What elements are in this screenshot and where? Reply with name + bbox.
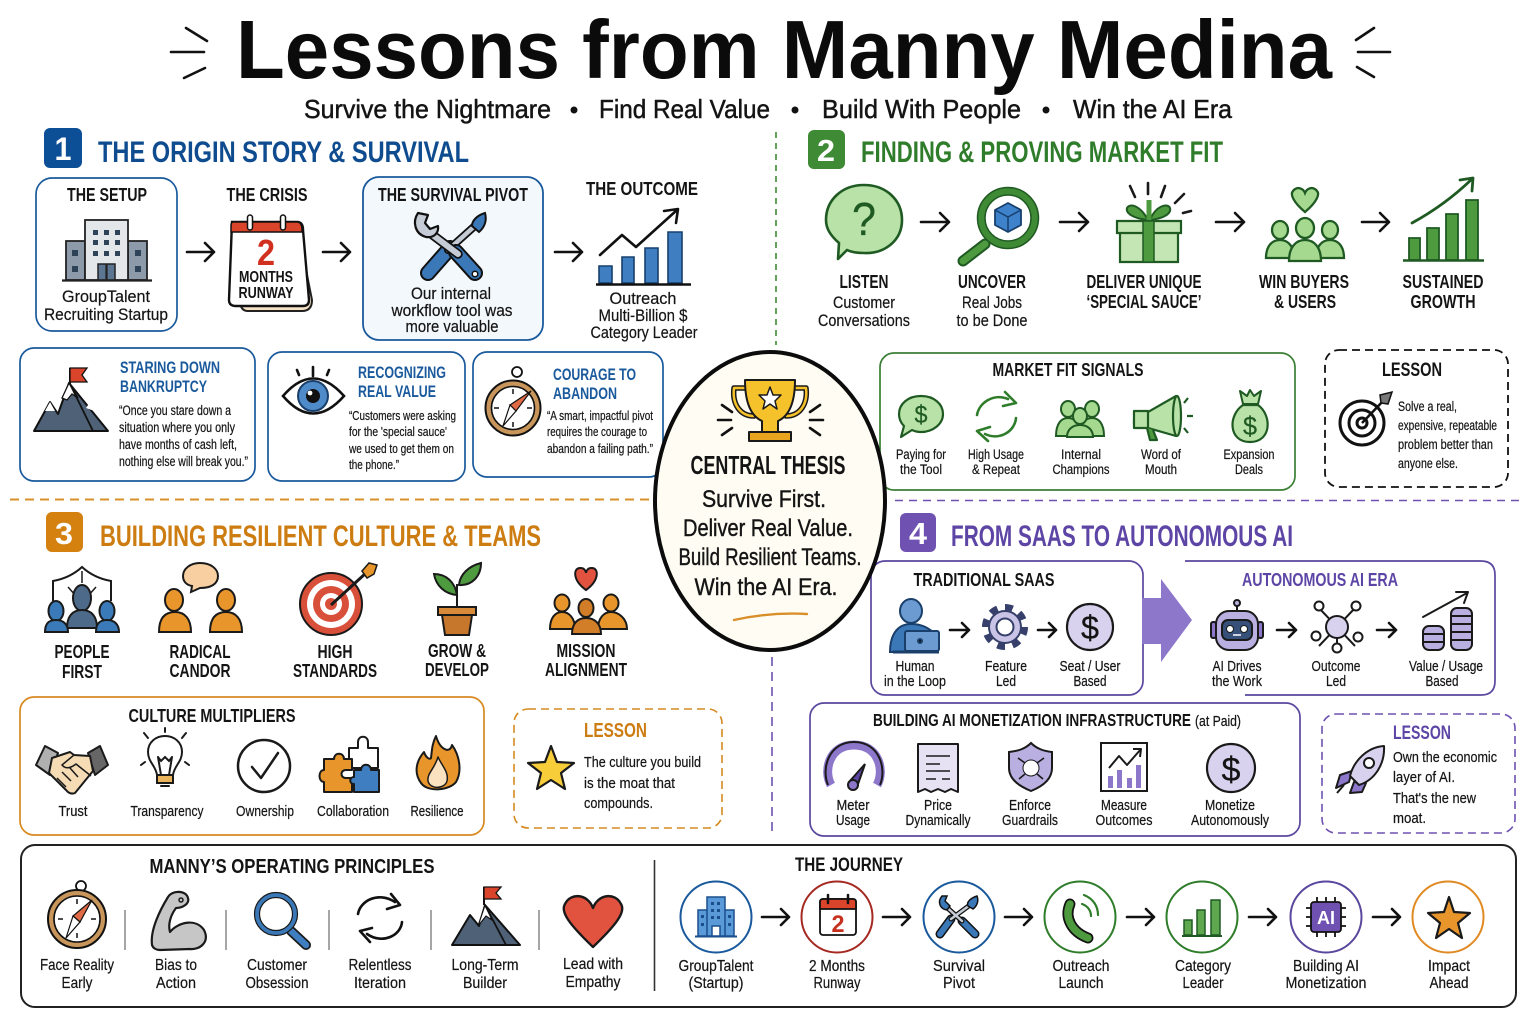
- icon: bars: [1182, 900, 1222, 936]
- panel: market fit signals: Champions: [1052, 462, 1110, 477]
- panel: operating principles: Iteration: [354, 975, 406, 992]
- item: people first: FIRST: [62, 662, 102, 682]
- icon: compass: [486, 367, 540, 436]
- panel: market fit signals: Paying for: [896, 447, 946, 462]
- panel: traditional saas: [871, 561, 1143, 695]
- callout: lesson 2: anyone else.: [1398, 456, 1458, 471]
- card: recognizing real value: “Customers were asking: [349, 408, 456, 423]
- central thesis oval: Build Resilient Teams.: [678, 544, 862, 571]
- panel: the journey: GroupTalent: [678, 958, 754, 975]
- icon: calendar: 2: [257, 232, 275, 273]
- item: high standards: [293, 563, 377, 681]
- step: listen: Conversations: [818, 312, 910, 330]
- panel: market fit signals: High Usage: [968, 447, 1024, 462]
- panel: culture multipliers: CULTURE MULTIPLIERS: [128, 706, 296, 726]
- panel: the journey: THE JOURNEY: [795, 855, 903, 876]
- panel: market fit signals: Deals: [1235, 462, 1263, 477]
- item: high standards: STANDARDS: [293, 661, 377, 681]
- icon: repeat arrows: [977, 392, 1016, 441]
- icon: handshake: [36, 746, 108, 794]
- heading: section 3: [46, 512, 541, 553]
- step: listen: LISTEN: [840, 272, 888, 292]
- card: recognizing real value: the phone.”: [349, 457, 399, 472]
- panel: bottom band: [21, 845, 1516, 1007]
- icon: champions: [1056, 401, 1104, 437]
- icon: target: [1340, 392, 1392, 445]
- heading: section 1: [44, 128, 469, 169]
- callout: lesson 3: compounds.: [584, 795, 653, 812]
- panel: market fit signals: Expansion: [1224, 447, 1274, 462]
- icon: light bulb: [141, 728, 189, 786]
- icon: question bubble: ?: [852, 193, 876, 245]
- panel: market fit signals: Mouth: [1145, 462, 1177, 477]
- icon: people with red heart: [550, 568, 627, 634]
- panel: AI monetization infrastructure: Usage: [836, 813, 870, 829]
- subtitle: Win the AI Era: [1073, 94, 1233, 124]
- panel: traditional saas: in the Loop: [884, 674, 946, 690]
- panel: culture multipliers: Trust: [58, 804, 88, 820]
- card: survival pivot: THE SURVIVAL PIVOT: [378, 185, 528, 205]
- heading: section 1: 1: [54, 131, 72, 167]
- card: the outcome: Category Leader: [590, 324, 698, 342]
- card: the outcome: THE OUTCOME: [586, 179, 698, 199]
- arrow: [1377, 623, 1396, 637]
- icon: phone: [1068, 895, 1098, 938]
- icon: refresh arrows: [358, 894, 402, 942]
- panel: traditional saas: Seat / User: [1060, 659, 1121, 675]
- callout: lesson 4: [1322, 714, 1515, 833]
- panel: the journey: Survival: [933, 958, 985, 975]
- callout: lesson 3: is the moat that: [584, 775, 676, 792]
- step: uncover: Real Jobs: [962, 294, 1022, 312]
- heading: section 4: [900, 513, 1293, 553]
- panel: market fit signals: Internal: [1061, 447, 1101, 462]
- icon: network: [1312, 602, 1362, 652]
- subtitle: [304, 94, 1233, 124]
- panel: autonomous AI era: AUTONOMOUS AI ERA: [1242, 570, 1398, 590]
- panel: market fit signals: MARKET FIT SIGNALS: [992, 360, 1144, 380]
- item: mission alignment: ALIGNMENT: [545, 660, 627, 680]
- panel: operating principles: Customer: [247, 957, 307, 974]
- icon: coins with arrow: [1423, 592, 1472, 650]
- icon: star: [528, 746, 574, 789]
- central thesis oval: CENTRAL THESIS: [690, 452, 846, 480]
- icon: dollar bubble: [899, 396, 943, 437]
- icon: gauge: [826, 742, 882, 790]
- card: the outcome: [586, 179, 698, 342]
- card: courage to abandon: “A smart, impactful pivot: [547, 408, 653, 423]
- card: staring down bankruptcy: [20, 348, 255, 481]
- card: recognizing real value: for the 'special sauce': [349, 424, 447, 439]
- icon: mountain with flag: [34, 368, 108, 431]
- item: radical candor: [159, 563, 242, 681]
- card: the setup: [36, 178, 177, 331]
- card: courage to abandon: COURAGE TO: [553, 365, 636, 384]
- icon: rocket: [1336, 746, 1384, 793]
- arrows: [762, 909, 1400, 925]
- icon: money bag: [1233, 390, 1268, 442]
- panel: autonomous AI era: AI Drives: [1212, 659, 1262, 675]
- card: staring down bankruptcy: nothing else will break you.”: [119, 454, 248, 469]
- panel: market fit signals: the Tool: [900, 462, 942, 477]
- heading: section 3: BUILDING RESILIENT CULTURE & TEAMS: [100, 520, 541, 553]
- card: the setup: THE SETUP: [67, 185, 147, 205]
- item: mission alignment: MISSION: [556, 641, 616, 661]
- step: sustained growth: SUSTAINED: [1402, 272, 1484, 292]
- item: radical candor: RADICAL: [170, 642, 230, 662]
- panel: autonomous AI era: Based: [1426, 674, 1458, 690]
- icon: money bag: $: [1243, 411, 1258, 441]
- step: uncover: to be Done: [956, 312, 1028, 330]
- icon: robot: [1211, 600, 1263, 650]
- item: grow and develop: [425, 563, 489, 680]
- panel: AI monetization infrastructure: Measure: [1101, 798, 1147, 814]
- central thesis oval: Win the AI Era.: [694, 574, 838, 601]
- panel: autonomous AI era: Led: [1326, 674, 1346, 690]
- card: survival pivot: [363, 177, 543, 340]
- step: deliver: DELIVER UNIQUE: [1086, 272, 1202, 292]
- card: the crisis: THE CRISIS: [226, 185, 308, 205]
- callout: lesson 3: The culture you build: [584, 754, 701, 771]
- panel: AI monetization infrastructure: Enforce: [1009, 798, 1051, 814]
- callout: lesson 4: LESSON: [1393, 722, 1451, 744]
- card: the outcome: Multi-Billion $: [598, 307, 688, 325]
- step: deliver: [1086, 183, 1202, 312]
- panel: culture multipliers: Transparency: [130, 804, 204, 820]
- panel: operating principles: Lead with: [563, 956, 623, 973]
- icon: dollar coin: [1207, 744, 1255, 792]
- icon: speech and two people: [159, 563, 242, 632]
- panel: the journey: [678, 855, 1484, 992]
- icon: wrench and screwdriver: [415, 213, 486, 277]
- panel: section 2 market fit: [808, 130, 1508, 490]
- icon: star: [1428, 897, 1470, 938]
- icon: wrench and screwdriver: [940, 896, 978, 934]
- icon: dollar coin: $: [1081, 609, 1099, 646]
- subtitle: Find Real Value: [599, 94, 770, 124]
- panel: traditional saas: Led: [996, 674, 1016, 690]
- panel: AI monetization infrastructure: Guardrails: [1002, 813, 1058, 829]
- icon: green chart: [1403, 178, 1484, 260]
- callout: lesson 2: expensive, repeatable: [1398, 418, 1497, 433]
- subtitle: Survive the Nightmare: [304, 94, 551, 124]
- icon: AI chip: AI: [1317, 908, 1335, 928]
- panel: culture multipliers: Ownership: [236, 804, 294, 820]
- central thesis oval: Survive First.: [702, 486, 826, 513]
- panel: the journey: Category: [1175, 958, 1231, 975]
- icon: gift: [1117, 183, 1191, 262]
- panel: AI monetization infrastructure: Dynamically: [906, 813, 971, 829]
- icon: calendar: RUNWAY: [238, 285, 294, 302]
- icon: question bubble: [826, 185, 902, 259]
- arrow: [950, 623, 969, 637]
- panel: the journey: Runway: [814, 975, 861, 992]
- panel: section 4 saas to AI: [810, 513, 1515, 836]
- icon: calendar: [820, 895, 856, 938]
- panel: operating principles: [40, 856, 623, 992]
- panel: traditional saas: Based: [1074, 674, 1106, 690]
- icon: check circle: [238, 740, 290, 792]
- arrow: [555, 243, 582, 261]
- callout: lesson 3: LESSON: [584, 720, 647, 742]
- panel: operating principles: Empathy: [566, 974, 621, 991]
- arrow: [323, 243, 350, 261]
- card: staring down bankruptcy: have months of cash left,: [119, 437, 237, 452]
- step: win buyers: WIN BUYERS: [1259, 272, 1349, 292]
- card: survival pivot: more valuable: [406, 318, 498, 336]
- callout: lesson 2: [1325, 350, 1508, 487]
- icon: magnifier: [254, 892, 306, 945]
- panel: the journey: Leader: [1182, 975, 1224, 992]
- panel: autonomous AI era: Value / Usage: [1409, 659, 1483, 675]
- title: Lessons from Manny Medina: [236, 3, 1333, 96]
- icon: plant: [434, 563, 481, 635]
- panel: autonomous AI era: the Work: [1212, 674, 1263, 690]
- panel: culture multipliers: Resilience: [410, 804, 464, 820]
- card: courage to abandon: requires the courage to: [547, 424, 647, 439]
- item: people first: [45, 567, 119, 682]
- card: the setup: Recruiting Startup: [44, 306, 168, 324]
- icon: chart in frame: [1101, 743, 1147, 791]
- card: survival pivot: workflow tool was: [391, 302, 512, 320]
- icon: people with heart: [1266, 188, 1344, 261]
- step: deliver: ‘SPECIAL SAUCE’: [1086, 292, 1202, 312]
- card: staring down bankruptcy: STARING DOWN: [120, 358, 220, 377]
- central thesis oval: [655, 352, 885, 650]
- heading: section 1: THE ORIGIN STORY & SURVIVAL: [98, 136, 469, 169]
- step: win buyers: & USERS: [1274, 292, 1336, 312]
- icon: shield: [1009, 743, 1052, 791]
- step: uncover: UNCOVER: [958, 272, 1026, 292]
- icon: flame: [417, 736, 459, 789]
- step: sustained growth: [1402, 178, 1484, 312]
- arrow: [1060, 213, 1088, 231]
- icon: shield and people: [45, 567, 119, 632]
- subtitle: Build With People: [822, 94, 1021, 124]
- arrow: [1362, 213, 1389, 231]
- heading: section 2: FINDING & PROVING MARKET FIT: [861, 136, 1223, 169]
- step: listen: [818, 185, 910, 330]
- card: recognizing real value: RECOGNIZING: [358, 363, 446, 382]
- panel: culture multipliers: [20, 697, 484, 835]
- journey circles: [680, 882, 1484, 952]
- panel: traditional saas: Human: [896, 659, 934, 675]
- item: radical candor: CANDOR: [170, 661, 230, 681]
- panel: section 3 culture: [20, 512, 722, 835]
- icon: calendar: MONTHS: [239, 269, 293, 286]
- panel: operating principles: Long-Term: [452, 957, 518, 974]
- panel: the journey: Impact: [1428, 958, 1471, 975]
- callout: lesson 3: [514, 709, 722, 828]
- heading: section 3: 3: [55, 516, 73, 551]
- heading: section 2: 2: [817, 133, 835, 168]
- icon: magnifier and cube: [963, 188, 1038, 261]
- card: staring down bankruptcy: situation where you only: [119, 420, 235, 435]
- icon: gear: [986, 608, 1024, 646]
- card: staring down bankruptcy: “Once you stare down a: [119, 403, 231, 418]
- card: courage to abandon: [473, 352, 663, 477]
- item: mission alignment: [545, 568, 627, 680]
- panel: AI monetization infrastructure: Outcomes: [1096, 813, 1152, 829]
- arrow: [1277, 623, 1296, 637]
- panel: operating principles: Early: [62, 975, 93, 992]
- icon: dollar coin: [1067, 604, 1113, 650]
- panel: AI monetization infrastructure: Meter: [836, 798, 870, 814]
- icon: dollar bubble: $: [914, 401, 928, 429]
- icon: heart: [564, 896, 622, 947]
- step: listen: Customer: [833, 294, 895, 312]
- icon: puzzle: [320, 737, 379, 792]
- panel: operating principles: Obsession: [246, 975, 308, 992]
- panel: market fit signals: [880, 353, 1295, 490]
- icon: trophy: [734, 380, 806, 441]
- panel: traditional saas: Feature: [985, 659, 1027, 675]
- panel: operating principles: Bias to: [155, 957, 197, 974]
- card: the outcome: Outreach: [610, 290, 676, 308]
- item: grow and develop: DEVELOP: [425, 660, 489, 680]
- panel: the journey: Building AI: [1293, 958, 1359, 975]
- icon: megaphone: [1134, 396, 1193, 440]
- icon: human at laptop: [890, 599, 939, 652]
- central thesis oval: Deliver Real Value.: [683, 515, 853, 542]
- panel: the journey: Launch: [1058, 975, 1104, 992]
- panel: operating principles: Builder: [463, 975, 507, 992]
- step: uncover: [956, 188, 1038, 330]
- card: recognizing real value: we used to get them on: [348, 441, 454, 456]
- panel: section 1 origin story: [20, 128, 698, 481]
- arrow: [1216, 213, 1244, 231]
- card: staring down bankruptcy: BANKRUPTCY: [120, 377, 207, 396]
- item: high standards: HIGH: [318, 642, 352, 662]
- icon: building: [695, 897, 737, 936]
- panel: culture multipliers: Collaboration: [317, 804, 389, 820]
- panel: autonomous AI era: Outcome: [1312, 659, 1360, 675]
- panel: the journey: Pivot: [943, 975, 976, 992]
- panel: AI monetization infrastructure: Monetize: [1205, 798, 1255, 814]
- panel: operating principles: MANNY’S OPERATING PRINCIPLES: [150, 856, 434, 878]
- heading: section 4: FROM SAAS TO AUTONOMOUS AI: [951, 520, 1293, 553]
- arrow: [921, 213, 949, 231]
- panel: AI monetization infrastructure: Price: [924, 798, 952, 814]
- item: grow and develop: GROW &: [428, 641, 486, 661]
- icon: building: [62, 220, 152, 280]
- panel: autonomous AI era: [1185, 561, 1495, 695]
- card: recognizing real value: [268, 352, 465, 481]
- card: courage to abandon: ABANDON: [553, 384, 617, 403]
- callout: lesson 4: layer of AI.: [1393, 769, 1455, 786]
- card: the crisis: [226, 185, 312, 311]
- arrow: [187, 243, 214, 261]
- panel: AI monetization infrastructure: BUILDING AI MONETIZATION INFRASTRUCTURE: [873, 710, 1191, 730]
- callout: lesson 2: Solve a real,: [1398, 399, 1457, 414]
- heading: section 4: 4: [909, 516, 928, 551]
- panel: AI monetization infrastructure: (at Paid): [1195, 713, 1241, 730]
- icon: dollar coin: $: [1222, 751, 1241, 789]
- item: people first: PEOPLE: [54, 642, 110, 662]
- panel: AI monetization infrastructure: [810, 703, 1300, 836]
- icon: receipt: [918, 744, 958, 792]
- panel: operating principles: Relentless: [348, 957, 412, 974]
- panel: traditional saas: TRADITIONAL SAAS: [914, 570, 1054, 590]
- icon: calendar: 2: [832, 911, 844, 938]
- panel: the journey: Monetization: [1286, 975, 1366, 992]
- icon: eye: [283, 367, 344, 414]
- panel: market fit signals: Word of: [1141, 447, 1181, 462]
- icon: compass: [48, 881, 106, 948]
- heading: section 2: [808, 130, 1223, 169]
- panel: the journey: (Startup): [688, 975, 744, 992]
- panel: AI monetization infrastructure: Autonomously: [1191, 813, 1270, 829]
- arrow: saas to AI: [1142, 579, 1192, 662]
- callout: lesson 4: moat.: [1393, 810, 1426, 827]
- step: sustained growth: GROWTH: [1410, 292, 1476, 312]
- panel: the journey: 2 Months: [809, 958, 865, 975]
- callout: lesson 2: problem better than: [1398, 437, 1493, 452]
- arrow: [1038, 623, 1056, 637]
- card: recognizing real value: REAL VALUE: [358, 382, 436, 401]
- icon: AI chip: [1306, 897, 1346, 937]
- callout: lesson 4: Own the economic: [1393, 749, 1497, 766]
- icon: mountain and flag: [452, 887, 520, 945]
- card: survival pivot: Our internal: [411, 285, 491, 303]
- icon: growth chart: [596, 209, 691, 284]
- panel: operating principles: Action: [156, 975, 196, 992]
- step: win buyers: [1259, 188, 1349, 312]
- panel: market fit signals: & Repeat: [972, 462, 1020, 477]
- icon: red target: [300, 563, 377, 635]
- panel: operating principles: Face Reality: [40, 957, 114, 974]
- icon: biceps: [152, 892, 206, 950]
- card: courage to abandon: abandon a failing path.”: [547, 441, 653, 456]
- card: the setup: GroupTalent: [62, 287, 150, 306]
- panel: the journey: Outreach: [1052, 958, 1110, 975]
- icon: calendar: [229, 215, 312, 311]
- panel: the journey: Ahead: [1430, 975, 1468, 992]
- callout: lesson 2: LESSON: [1382, 360, 1442, 381]
- callout: lesson 4: That's the new: [1393, 790, 1476, 807]
